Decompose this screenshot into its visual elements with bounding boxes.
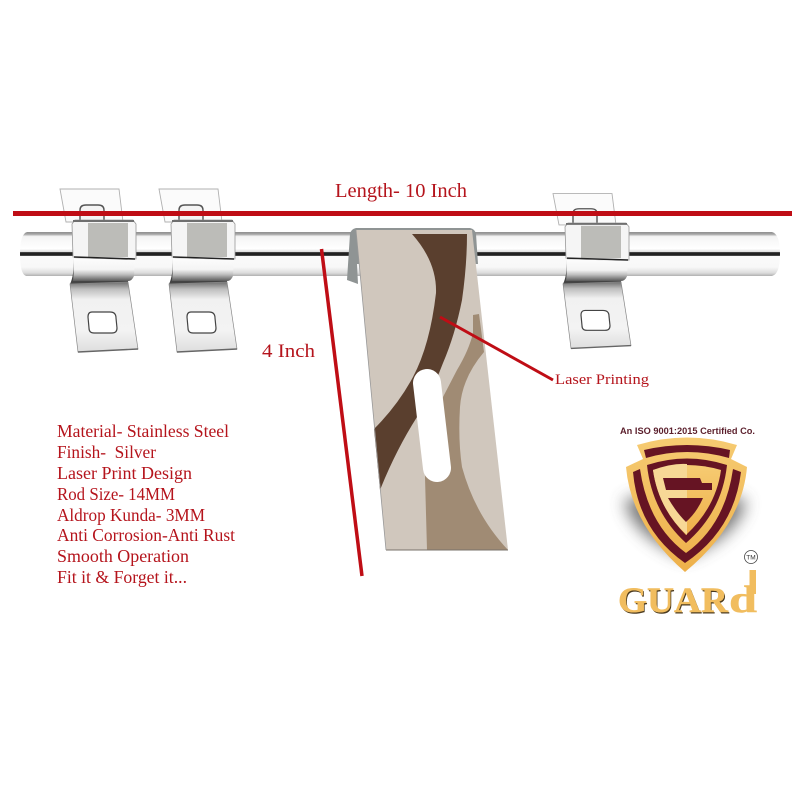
specification list — [57, 421, 235, 587]
logo shadow — [624, 492, 746, 558]
length dimension line — [13, 211, 792, 216]
specification list: Anti Corrosion-Anti Rust — [57, 525, 235, 545]
bracket: left — [70, 220, 138, 352]
specification list: Laser Print Design — [57, 463, 192, 483]
specification list: Smooth Operation — [57, 546, 189, 566]
shield — [626, 438, 747, 572]
hinged kunda plate with laser print — [347, 228, 508, 550]
specification list: Material- Stainless Steel — [57, 421, 229, 441]
upper mounting plates — [60, 189, 616, 225]
height label: 4 Inch — [262, 342, 315, 362]
Guard logo — [618, 426, 758, 622]
steel rod — [20, 232, 780, 276]
trademark: TM — [746, 554, 756, 562]
specification list: Rod Size- 14MM — [57, 484, 175, 504]
wordmark d: d — [729, 579, 757, 621]
length label: Length- 10 Inch — [335, 180, 467, 202]
trademark — [744, 550, 758, 564]
specification list: Aldrop Kunda- 3MM — [57, 505, 205, 525]
laser printing label: Laser Printing — [555, 372, 650, 388]
GUARD wordmark shadow: GUAR — [619, 582, 730, 622]
specification list: Finish- Silver — [57, 442, 156, 462]
bracket: second — [169, 220, 237, 352]
wordmark d — [729, 570, 757, 621]
height dimension line — [322, 249, 362, 576]
certification line: An ISO 9001:2015 Certified Co. — [620, 426, 755, 437]
bracket: right — [563, 223, 631, 348]
GUARD wordmark: GUAR — [618, 580, 729, 620]
specification list: Fit it & Forget it... — [57, 567, 187, 587]
laser printing pointer — [440, 317, 553, 380]
